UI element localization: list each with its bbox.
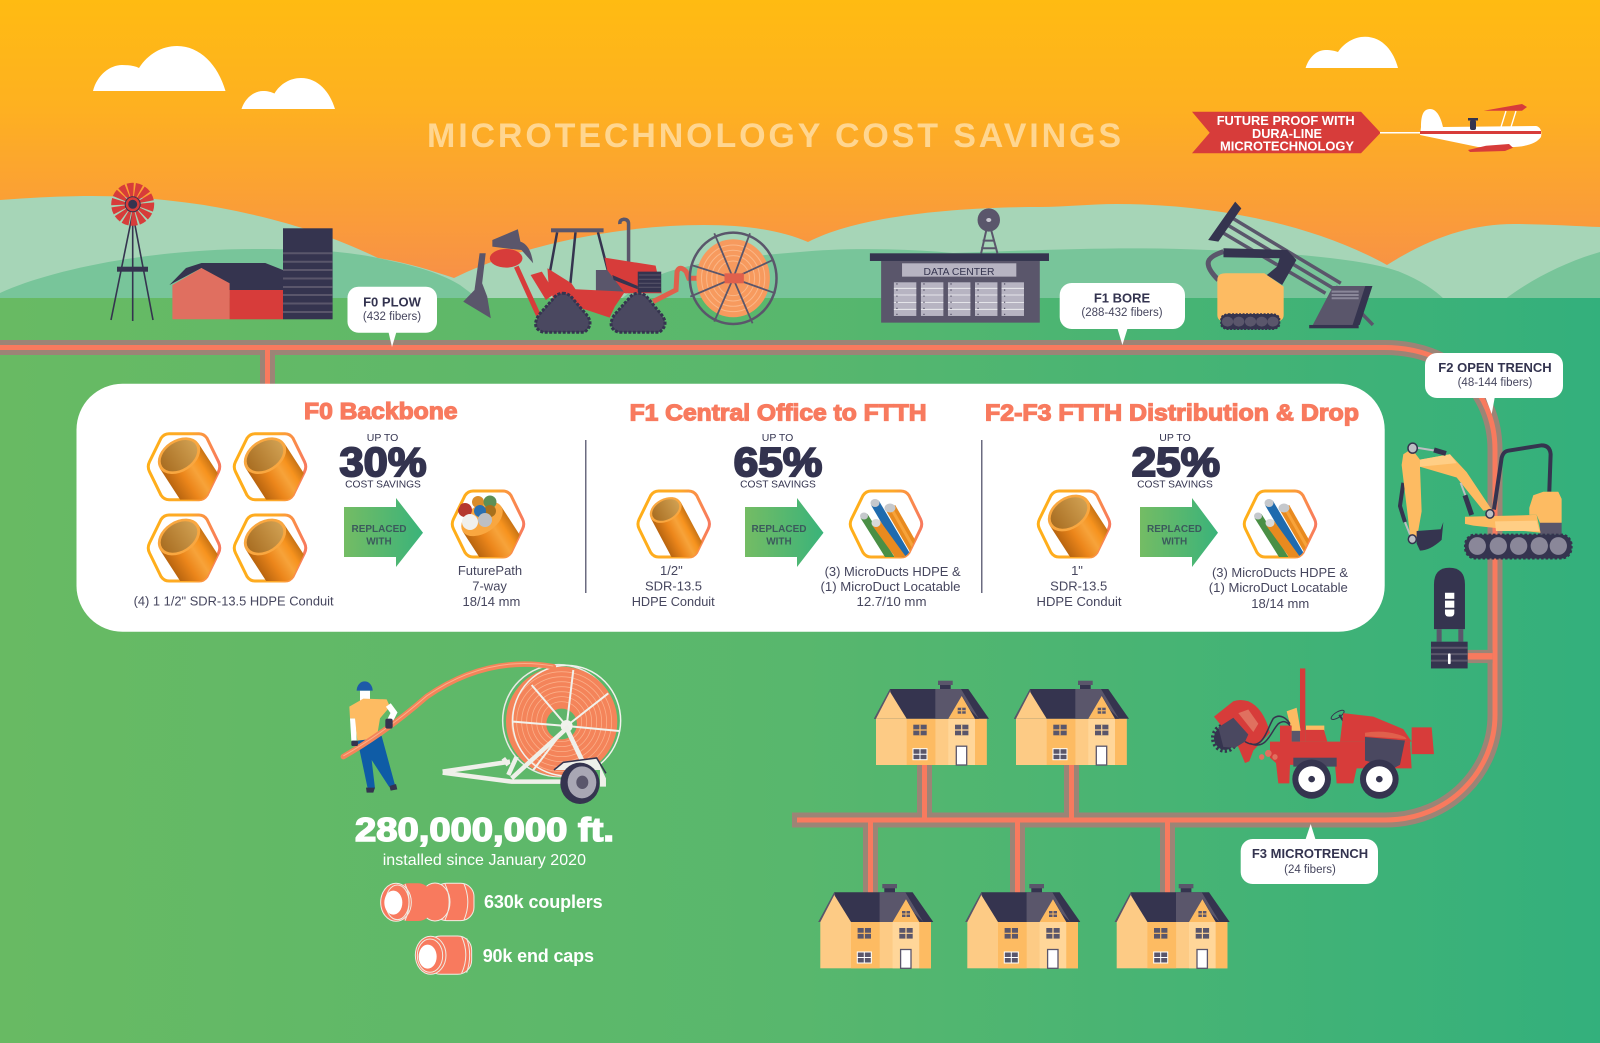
- stat: 30 percent: UP TO: [367, 432, 398, 444]
- callout: F0 plow: F0 PLOW: [363, 294, 422, 310]
- callout: F2 open trench: [1425, 353, 1563, 414]
- label: end caps: 90k end caps: [483, 946, 594, 966]
- icon: worker carrying conduit: [343, 663, 553, 793]
- caption: microducts 12.7/10: 12.7/10 mm: [856, 594, 926, 609]
- stat: 65 percent: 65%: [734, 439, 822, 485]
- banner towed by plane: DURA-LINE: [1252, 126, 1322, 141]
- stat: 65 percent: COST SAVINGS: [740, 479, 816, 491]
- caption: microducts 12.7/10: (3) MicroDucts HDPE &: [825, 564, 961, 579]
- text: installed since: installed since January 2020: [383, 852, 586, 869]
- callout: F3 microtrench: [1241, 824, 1378, 884]
- caption: microducts 18/14: (1) MicroDuct Locatable: [1209, 580, 1348, 595]
- icon: microtrencher: [1214, 668, 1434, 799]
- icon: microducts hex F1: [850, 491, 922, 559]
- stat: 30 percent: COST SAVINGS: [345, 479, 421, 491]
- arrow: replaced with F2-F3: REPLACED: [1147, 524, 1202, 535]
- callout: F1 bore: (288-432 fibers): [1081, 307, 1163, 319]
- icon: airplane: [1380, 104, 1541, 152]
- caption: microducts 18/14: 18/14 mm: [1251, 596, 1309, 611]
- icon: conduit hex 1: [148, 430, 242, 535]
- panel: cost savings comparison: [76, 384, 1385, 632]
- icon: one inch conduit hex: [1038, 487, 1132, 593]
- arrow: replaced with F2-F3: [1140, 498, 1218, 567]
- front hills: [0, 248, 1600, 300]
- caption: futurepath: 18/14 mm: [462, 594, 520, 609]
- icon: conduit hex 3: [148, 511, 242, 617]
- cloud 3: [1306, 37, 1398, 68]
- stat: 65 percent: UP TO: [762, 432, 793, 444]
- icon: house bottom middle: [965, 884, 1080, 968]
- icon: couplers: [381, 883, 474, 921]
- icon: directional bore machine: [1208, 202, 1373, 329]
- stat: 25 percent: 25%: [1132, 439, 1220, 485]
- caption: microducts 18/14: [1209, 565, 1348, 611]
- icon: house top left: [874, 681, 989, 765]
- callout: F1 bore: F1 BORE: [1094, 290, 1150, 306]
- icon: conduit hex 4: [234, 511, 328, 617]
- caption: microducts 18/14: (3) MicroDucts HDPE &: [1212, 565, 1348, 580]
- back hills: [0, 196, 1600, 300]
- arrow: replaced with F0: [344, 498, 423, 567]
- caption: four conduits: (4) 1 1/2" SDR-13.5 HDPE Conduit: [134, 594, 334, 608]
- callout: F2 open trench: F2 OPEN TRENCH: [1438, 360, 1552, 375]
- icon: half inch conduit hex: [638, 491, 718, 589]
- heading: F1 central office: F1 Central Office to FTTH: [630, 400, 927, 426]
- stat: 30 percent: 30%: [340, 439, 426, 485]
- icon: house top right: [1014, 681, 1129, 765]
- title: MICROTECHNOLOGY COST SAVINGS: [427, 117, 1121, 155]
- heading: F2-F3 distribution: F2-F3 FTTH Distribution & Drop: [985, 400, 1359, 426]
- caption: one inch conduit: SDR-13.5: [1050, 578, 1107, 594]
- banner towed by plane: [1192, 112, 1381, 154]
- caption: microducts 12.7/10: [820, 564, 961, 609]
- caption: futurepath: 7-way: [472, 578, 507, 594]
- caption: one inch conduit: [1036, 563, 1122, 609]
- banner towed by plane: MICROTECHNOLOGY: [1220, 139, 1354, 154]
- arrow: replaced with F1: [745, 498, 824, 567]
- caption: futurepath: FuturePath: [458, 563, 522, 578]
- arrow: replaced with F1: REPLACED: [751, 524, 807, 535]
- icon: house bottom right: [1115, 884, 1230, 968]
- icon: utility cabinet: [1431, 568, 1493, 668]
- callout: F1 bore: [1060, 283, 1185, 345]
- ground: [0, 298, 1600, 1043]
- icon: barn and silo: [169, 228, 333, 319]
- sky background: [0, 0, 1600, 300]
- caption: microducts 12.7/10: (1) MicroDuct Locatable: [820, 579, 960, 594]
- callout: F3 microtrench: F3 MICROTRENCH: [1252, 846, 1368, 861]
- stat: feet installed: 280,000,000 ft.: [355, 811, 614, 848]
- caption: one inch conduit: 1": [1071, 563, 1083, 578]
- cloud 2: [242, 78, 335, 109]
- cloud 1: [93, 46, 226, 91]
- arrow: replaced with F0: REPLACED: [351, 524, 407, 535]
- icon: conduit hex 2: [234, 430, 328, 535]
- callout: F0 plow: (432 fibers): [363, 311, 421, 323]
- arrow: replaced with F0: WITH: [366, 536, 392, 548]
- stat: 25 percent: UP TO: [1159, 432, 1191, 444]
- heading: F0 backbone: F0 Backbone: [304, 398, 458, 424]
- caption: half inch conduit: SDR-13.5: [645, 578, 702, 594]
- caption: half inch conduit: HDPE Conduit: [632, 594, 715, 609]
- icon: microducts hex F2-F3: [1244, 491, 1316, 559]
- icon: data center building: [870, 208, 1049, 323]
- caption: one inch conduit: HDPE Conduit: [1036, 594, 1122, 609]
- conduit route: [0, 348, 1495, 893]
- arrow: replaced with F2-F3: WITH: [1162, 536, 1187, 548]
- icon: house bottom left: [818, 884, 933, 968]
- stat: 25 percent: COST SAVINGS: [1137, 479, 1213, 491]
- arrow: replaced with F1: WITH: [766, 536, 792, 548]
- callout: F0 plow: [348, 287, 437, 347]
- icon: futurepath hex: [452, 491, 545, 599]
- caption: futurepath: [458, 563, 522, 609]
- callout: F2 open trench: (48-144 fibers): [1458, 377, 1533, 389]
- icon: windmill: [111, 190, 153, 321]
- caption: half inch conduit: [632, 563, 715, 609]
- icon: end caps: [415, 936, 472, 974]
- icon: conduit reel on trailer: [443, 665, 621, 804]
- label: couplers: 630k couplers: [484, 892, 603, 912]
- callout: F3 microtrench: (24 fibers): [1284, 864, 1336, 876]
- icon: tractor with plow and reel: [463, 219, 777, 332]
- banner towed by plane: FUTURE PROOF WITH: [1217, 113, 1355, 128]
- icon: data center building: DATA CENTER: [924, 266, 995, 278]
- caption: half inch conduit: 1/2": [660, 563, 683, 578]
- icon: excavator: [1400, 443, 1572, 558]
